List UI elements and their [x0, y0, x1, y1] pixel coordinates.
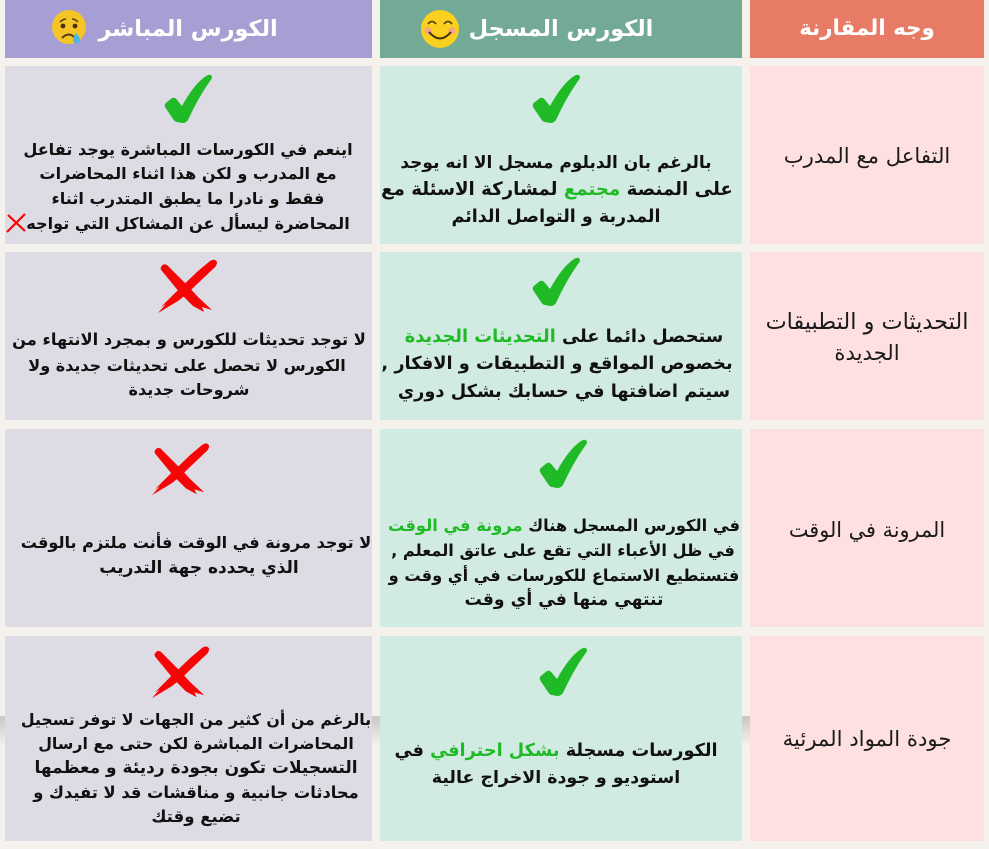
text: poor recordings: بالرغم من أن كثير من الجهات لا توفر تسجيل	[21, 710, 371, 729]
row 3: aspect cell	[750, 429, 984, 627]
row 1: recorded course cell	[380, 66, 742, 244]
text: poor recordings: التسجيلات تكون بجودة رديئة و معظمها	[34, 758, 358, 778]
icon: smiling face	[421, 10, 459, 48]
text: no updates	[12, 330, 366, 399]
text: time flexibility: في الكورس المسجل هناك مرونة في الوقت	[388, 516, 740, 535]
text: live interaction: مع المدرب و لكن هذا اثناء المحاضرات	[39, 164, 337, 183]
icon: check mark	[164, 74, 212, 123]
text: poor recordings	[21, 710, 371, 826]
text: recorded interaction: المدربة و التواصل الدائم	[451, 207, 661, 227]
text: no updates: شروحات جديدة	[128, 380, 250, 399]
text: time flexibility: في ظل الأعباء التي تقع على عاتق المعلم ,	[391, 541, 735, 560]
text: constant updates: سيتم اضافتها في حسابك بشكل دوري	[398, 381, 730, 402]
label: time flexibility: المرونة في الوقت	[789, 518, 945, 542]
header: live course	[5, 0, 372, 58]
text: recorded interaction: على المنصة مجتمع لمشاركة الاسئلة مع	[381, 179, 733, 200]
text: poor recordings: محادثات جانبية و مناقشات قد لا تفيدك و	[33, 783, 359, 802]
icon: red cross	[152, 646, 210, 698]
text: professional production	[394, 741, 718, 788]
row 3: recorded course cell	[380, 429, 742, 627]
icon: red cross	[158, 260, 217, 313]
row 3: live course cell	[5, 429, 372, 627]
text: live interaction: اينعم في الكورسات المباشرة يوجد تفاعل	[23, 140, 353, 159]
text: no flexibility: لا توجد مرونة في الوقت فأنت ملتزم بالوقت	[21, 533, 371, 552]
text: time flexibility	[388, 516, 740, 610]
text: constant updates: ستحصل دائما على التحديثات الجديدة	[405, 326, 723, 347]
heading: recorded course: الكورس المسجل	[469, 16, 653, 42]
text: professional production: الكورسات مسجلة بشكل احترافي في	[394, 741, 718, 761]
row 2: aspect cell	[750, 252, 984, 420]
label: trainer interaction: التفاعل مع المدرب	[784, 143, 950, 168]
text: poor recordings: المحاضرات المباشرة لكن حتى مع ارسال	[38, 734, 354, 753]
label: updates and new apps: التحديثات و التطبيقات	[766, 309, 968, 335]
icon: small red cross	[6, 213, 26, 233]
row 4: aspect cell	[750, 636, 984, 841]
icon: check mark	[540, 648, 587, 696]
label: video quality: جودة المواد المرئية	[783, 726, 951, 751]
header: recorded course	[380, 0, 742, 58]
row 1: live course cell	[5, 66, 372, 244]
text: live interaction: فقط و نادرا ما يطبق المتدرب اثناء	[52, 189, 324, 208]
icon: check mark	[540, 440, 587, 488]
row 4: recorded course cell	[380, 636, 742, 841]
text: live interaction: المحاضرة ليسأل عن المشاكل التي تواجه	[26, 214, 350, 233]
icon: check mark	[532, 258, 580, 306]
row 1: aspect cell	[750, 66, 984, 244]
text: no updates: الكورس لا تحصل على تحديثات جديدة ولا	[28, 356, 346, 375]
text: live interaction	[23, 140, 353, 233]
text: no updates: لا توجد تحديثات للكورس و بمجرد الانتهاء من	[12, 330, 366, 349]
text: poor recordings: تضيع وقتك	[151, 807, 241, 826]
text: constant updates	[381, 326, 733, 402]
heading: live course: الكورس المباشر	[98, 16, 278, 42]
label: updates and new apps: الجديدة	[834, 340, 900, 365]
text: professional production: استوديو و جودة الاخراج عالية	[432, 768, 680, 788]
label: updates and new apps	[766, 309, 968, 365]
row 4: live course cell	[5, 636, 372, 841]
row 2: recorded course cell	[380, 252, 742, 420]
text: no flexibility	[21, 532, 371, 578]
text: recorded interaction: بالرغم بان الدبلوم مسجل الا انه يوجد	[400, 153, 712, 173]
text: no flexibility: الذي يحدده جهة التدريب	[99, 558, 299, 578]
text: recorded interaction	[381, 153, 733, 227]
row 2: live course cell	[5, 252, 372, 420]
icon: check mark	[532, 74, 580, 123]
text: constant updates: بخصوص المواقع و التطبيقات و الافكار ,	[381, 353, 733, 374]
icon: crying face	[52, 10, 86, 44]
icon: red cross	[152, 444, 210, 495]
header: comparison aspect	[750, 0, 984, 58]
text: time flexibility: فتستطيع الاستماع للكورسات في أي وقت و	[389, 566, 739, 585]
text: time flexibility: تنتهي منها في أي وقت	[464, 590, 664, 610]
heading: comparison aspect: وجه المقارنة	[799, 16, 935, 41]
